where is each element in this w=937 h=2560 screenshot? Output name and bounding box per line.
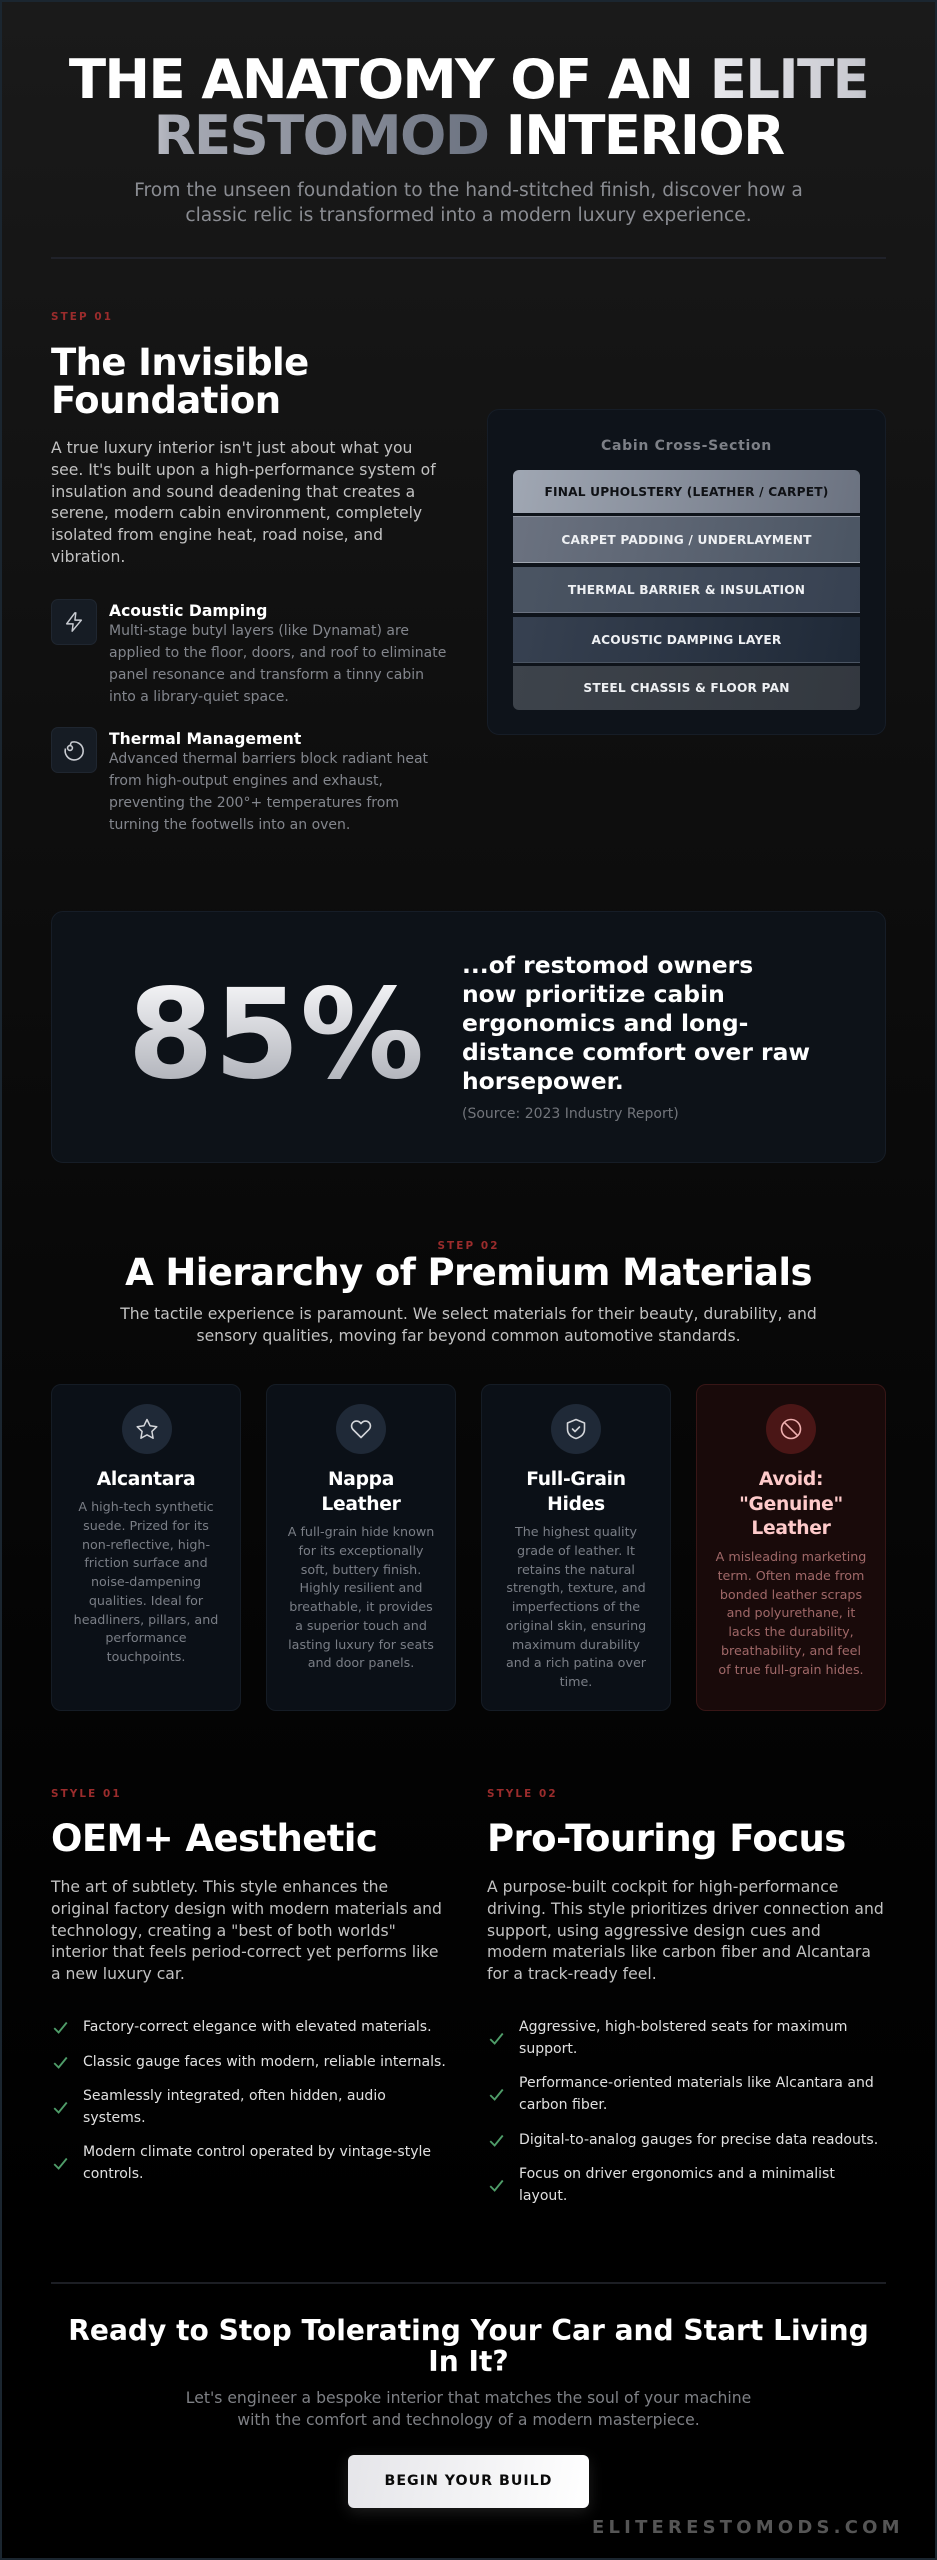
- call to action text: [186, 2389, 751, 2429]
- nappa description: and door panels.: [308, 1655, 414, 1670]
- call to action heading: [68, 2314, 869, 2378]
- avoid description: term. Often made from: [718, 1568, 864, 1583]
- feature: acoustic damping: Multi-stage butyl layers (like Dynamat) are: [109, 623, 409, 639]
- pro-touring paragraph: modern materials like carbon fiber and Alcantara: [487, 1943, 871, 1961]
- alcantara description: performance: [105, 1630, 187, 1645]
- pro-touring paragraph: [487, 1878, 884, 1983]
- list: oem+ features: [54, 2019, 446, 2182]
- layer: thermal barrier: THERMAL BARRIER & INSULATION: [568, 583, 805, 597]
- full-grain description: maximum durability: [512, 1636, 640, 1652]
- layer: steel chassis: [513, 666, 860, 710]
- full-grain description: strength, texture, and: [506, 1580, 646, 1595]
- oem+ paragraph: interior that feels period-correct yet performs like: [51, 1943, 439, 1961]
- materials intro: sensory qualities, moving far beyond common automotive standards.: [196, 1326, 741, 1344]
- icon: acoustic damping bolt: [51, 599, 97, 645]
- nappa description: A full-grain hide known: [288, 1524, 434, 1539]
- list: oem+ features: Seamlessly integrated, often hidden, audio: [83, 2088, 386, 2104]
- avoid description: A misleading marketing: [716, 1549, 866, 1564]
- title: THE ANATOMY OF AN ELITE: [69, 47, 868, 111]
- alcantara description: noise-dampening: [91, 1574, 201, 1589]
- intro paragraph: [51, 439, 436, 566]
- alcantara description: suede. Prized for its: [83, 1518, 209, 1533]
- icon: heart: [336, 1404, 386, 1454]
- nappa description: a superior touch and: [295, 1618, 427, 1633]
- statistic text: [462, 950, 810, 1095]
- nappa title: Nappa: [328, 1469, 394, 1490]
- full-grain description: The highest quality: [515, 1524, 637, 1539]
- avoid title: Leather: [751, 1518, 831, 1539]
- oem+ paragraph: The art of subtlety. This style enhances the: [51, 1878, 388, 1896]
- step 01 label: STEP 01: [51, 311, 113, 323]
- nappa description: soft, buttery finish.: [301, 1562, 421, 1576]
- icon: thermal management: [51, 727, 97, 773]
- layer: acoustic damping: [513, 617, 860, 663]
- alcantara description: qualities. Ideal for: [89, 1593, 203, 1608]
- intro paragraph: serene, modern cabin environment, completely: [51, 504, 422, 522]
- list: pro-touring features: support.: [519, 2041, 577, 2057]
- full-grain description: time.: [560, 1674, 592, 1689]
- cabin cross-section title: Cabin Cross-Section: [601, 438, 772, 454]
- pro-touring paragraph: support, using aggressive design cues and: [487, 1922, 821, 1940]
- heading: the invisible foundation: The Invisible: [51, 341, 309, 384]
- nappa description: breathable, it provides: [289, 1599, 433, 1614]
- nappa description: for its exceptionally: [299, 1543, 423, 1558]
- materials intro: [120, 1305, 817, 1344]
- nappa description: lasting luxury for seats: [288, 1636, 434, 1652]
- avoid description: bonded leather scraps: [720, 1586, 862, 1602]
- call to action heading: In It?: [428, 2345, 509, 2378]
- heading: the invisible foundation: [51, 341, 309, 422]
- feature: acoustic damping: applied to the floor, doors, and roof to eliminate: [109, 645, 446, 661]
- avoid description: [716, 1549, 866, 1676]
- footer website: ELITERESTOMODS.COM: [592, 2517, 904, 2538]
- full-grain title: Full-Grain: [526, 1469, 626, 1490]
- alcantara description: touchpoints.: [107, 1649, 185, 1664]
- call to action heading: Ready to Stop Tolerating Your Car and Start Living: [68, 2314, 869, 2347]
- avoid description: breathability, and feel: [721, 1643, 861, 1658]
- statistic text: horsepower.: [462, 1067, 624, 1095]
- feature: thermal management: Advanced thermal barriers block radiant heat: [109, 751, 428, 767]
- pro-touring paragraph: for a track-ready feel.: [487, 1965, 657, 1983]
- materials intro: The tactile experience is paramount. We select materials for their beauty, durability, and: [120, 1305, 817, 1323]
- heading: hierarchy of materials: A Hierarchy of Premium Materials: [125, 1251, 812, 1294]
- oem+ paragraph: [50, 1878, 442, 1983]
- intro paragraph: see. It's built upon a high-performance system of: [51, 461, 436, 479]
- avoid description: lacks the durability,: [728, 1624, 854, 1639]
- card: nappa leather: [266, 1384, 456, 1711]
- alcantara description: headliners, pillars, and: [74, 1612, 218, 1626]
- list: oem+ features: Factory-correct elegance with elevated materials.: [83, 2019, 432, 2035]
- list: oem+ features: systems.: [83, 2110, 146, 2126]
- list: oem+ features: Classic gauge faces with modern, reliable internals.: [83, 2054, 446, 2070]
- list: pro-touring features: layout.: [519, 2188, 567, 2204]
- alcantara description: A high-tech synthetic: [78, 1499, 214, 1514]
- subtitle: classic relic is transformed into a modern luxury experience.: [185, 204, 752, 226]
- oem+ paragraph: a new luxury car.: [51, 1965, 185, 1983]
- avoid title: [739, 1469, 843, 1539]
- alcantara description: [74, 1499, 218, 1664]
- alcantara description: non-reflective, high-: [82, 1536, 210, 1552]
- panel: cabin cross-section: [487, 409, 886, 735]
- alcantara description: friction surface and: [84, 1555, 208, 1570]
- intro paragraph: A true luxury interior isn't just about what you: [51, 439, 412, 457]
- icon: ban: [766, 1404, 816, 1454]
- list: pro-touring features: Aggressive, high-bolstered seats for maximum: [519, 2019, 847, 2035]
- panel: statistic: [51, 911, 886, 1163]
- heading: the invisible foundation: Foundation: [51, 378, 280, 422]
- feature: thermal management: preventing the 200°+ temperatures from: [109, 795, 399, 811]
- avoid title: "Genuine": [739, 1494, 843, 1515]
- call to action text: with the comfort and technology of a modern masterpiece.: [237, 2411, 700, 2429]
- layer: acoustic damping: ACOUSTIC DAMPING LAYER: [591, 633, 782, 647]
- full-grain title: Hides: [547, 1494, 605, 1515]
- full-grain title: [526, 1469, 626, 1515]
- layer: thermal barrier: [513, 567, 860, 613]
- title: [69, 47, 868, 167]
- pro-touring paragraph: driving. This style prioritizes driver connection and: [487, 1900, 884, 1918]
- list: pro-touring features: Digital-to-analog gauges for precise data readouts.: [519, 2132, 878, 2148]
- feature: acoustic damping: Acoustic Damping: [109, 602, 267, 620]
- list: pro-touring features: Performance-oriented materials like Alcantara and: [519, 2075, 874, 2091]
- oem+ paragraph: technology, creating a "best of both worlds": [51, 1922, 396, 1940]
- step 02 label: STEP 02: [437, 1240, 500, 1252]
- intro paragraph: vibration.: [51, 548, 125, 566]
- list: oem+ features: Modern climate control operated by vintage-style: [83, 2144, 431, 2160]
- statistic number: 85%: [128, 963, 424, 1107]
- avoid title: Avoid:: [759, 1469, 823, 1490]
- subtitle: [134, 180, 803, 226]
- feature: acoustic damping: into a library-quiet space.: [109, 689, 289, 705]
- icon: shield check: [551, 1404, 601, 1454]
- button: begin your build: BEGIN YOUR BUILD: [385, 2473, 552, 2489]
- layer: steel chassis: STEEL CHASSIS & FLOOR PAN: [583, 681, 790, 695]
- full-grain description: [506, 1524, 646, 1689]
- style 01 label: STYLE 01: [51, 1788, 122, 1800]
- layer: upholstery: FINAL UPHOLSTERY (LEATHER / CARPET): [544, 484, 829, 498]
- title: RESTOMOD INTERIOR: [154, 103, 783, 167]
- layer: upholstery: [513, 470, 860, 513]
- layer: carpet padding: [513, 516, 860, 563]
- full-grain description: retains the natural: [517, 1562, 635, 1576]
- icon: star: [122, 1404, 172, 1454]
- card: alcantara: [51, 1384, 241, 1711]
- full-grain description: and a rich patina over: [506, 1655, 646, 1670]
- feature: acoustic damping: panel resonance and transform a tinny cabin: [109, 667, 424, 683]
- subtitle: From the unseen foundation to the hand-stitched finish, discover how a: [134, 180, 803, 200]
- statistic text: distance comfort over raw: [462, 1038, 810, 1066]
- call to action text: Let's engineer a bespoke interior that matches the soul of your machine: [186, 2389, 751, 2407]
- list: pro-touring features: Focus on driver ergonomics and a minimalist: [519, 2166, 835, 2182]
- feature: thermal management: [109, 730, 428, 833]
- heading: pro-touring focus: Pro-Touring Focus: [487, 1817, 846, 1860]
- heading: oem+ aesthetic: OEM+ Aesthetic: [51, 1817, 377, 1860]
- oem+ paragraph: original factory design with modern materials and: [51, 1900, 442, 1918]
- avoid description: of true full-grain hides.: [718, 1662, 864, 1676]
- nappa description: [288, 1524, 434, 1670]
- statistic text: ergonomics and long-: [462, 1009, 748, 1037]
- card: full-grain hides: [481, 1384, 671, 1711]
- feature: thermal management: from high-output engines and exhaust,: [109, 773, 383, 789]
- full-grain description: grade of leather. It: [517, 1543, 635, 1558]
- full-grain description: original skin, ensuring: [506, 1618, 646, 1633]
- statistic text: now prioritize cabin: [462, 980, 725, 1008]
- avoid description: and polyurethane, it: [727, 1605, 855, 1620]
- layer: carpet padding: CARPET PADDING / UNDERLAYMENT: [561, 532, 812, 546]
- card: avoid genuine leather: [696, 1384, 886, 1711]
- list: oem+ features: controls.: [83, 2166, 143, 2182]
- nappa description: Highly resilient and: [300, 1580, 422, 1595]
- button: begin your build: [348, 2455, 589, 2508]
- nappa title: Leather: [321, 1494, 401, 1515]
- style 02 label: STYLE 02: [487, 1788, 558, 1800]
- statistic source: (Source: 2023 Industry Report): [462, 1106, 679, 1122]
- intro paragraph: insulation and sound deadening that creates a: [51, 483, 415, 501]
- list: pro-touring features: carbon fiber.: [519, 2097, 607, 2113]
- intro paragraph: isolated from engine heat, road noise, and: [51, 526, 383, 544]
- pro-touring paragraph: A purpose-built cockpit for high-performance: [487, 1878, 838, 1896]
- feature: thermal management: Thermal Management: [109, 730, 301, 748]
- feature: acoustic damping: [109, 602, 446, 705]
- full-grain description: imperfections of the: [512, 1599, 640, 1614]
- statistic text: ...of restomod owners: [462, 950, 753, 978]
- alcantara title: Alcantara: [97, 1469, 195, 1490]
- feature: thermal management: turning the footwells into an oven.: [109, 817, 350, 833]
- nappa title: [321, 1469, 401, 1515]
